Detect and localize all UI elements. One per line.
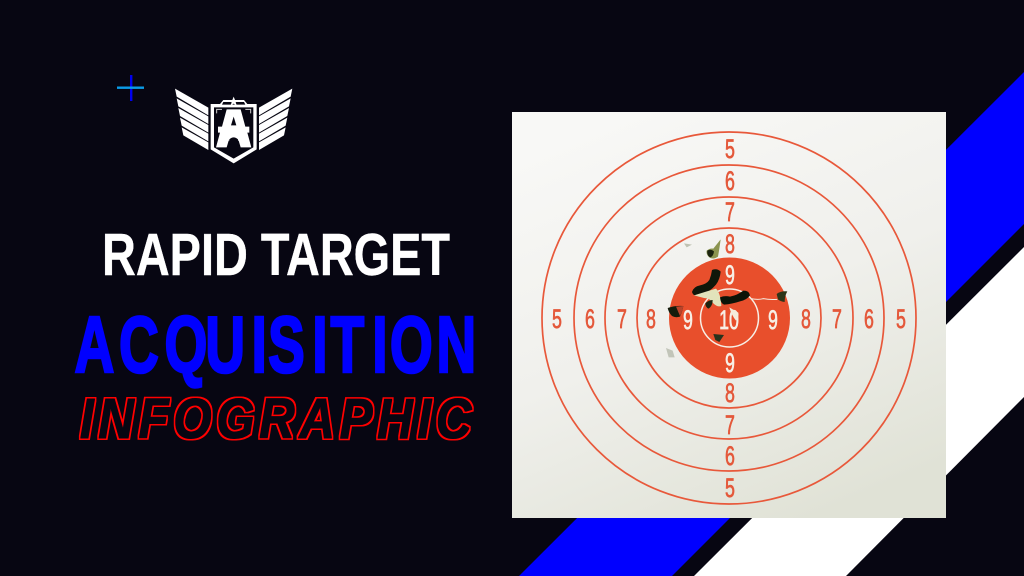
bullet holes	[666, 239, 787, 357]
left wing	[175, 89, 208, 150]
ring numbers: 5	[725, 133, 735, 164]
shield	[211, 100, 257, 163]
ring numbers: 7	[725, 196, 735, 227]
title: ACQUISITION: ACQUISITION	[75, 300, 476, 389]
ring numbers: 5	[725, 472, 735, 503]
bullseye numbers: 9	[725, 259, 735, 290]
bullseye numbers: 9	[725, 347, 735, 378]
ring numbers	[552, 133, 906, 503]
ring numbers: 5	[896, 303, 906, 334]
star	[229, 97, 239, 106]
bullseye numbers: 9	[768, 304, 778, 335]
title: RAPID TARGET: RAPID TARGET	[102, 222, 450, 288]
ring numbers: 7	[832, 303, 842, 334]
bullseye numbers: 9	[683, 304, 693, 335]
ring numbers: 6	[725, 440, 735, 471]
ring numbers: 6	[725, 165, 735, 196]
target rings	[542, 132, 916, 504]
ten ring	[700, 289, 758, 347]
panel: paper target	[512, 112, 946, 518]
icon: blue crosshair	[117, 75, 144, 101]
diagonal white band	[694, 247, 1024, 576]
ring numbers: 6	[585, 303, 595, 334]
ring numbers: 8	[725, 377, 735, 408]
ring numbers: 8	[801, 303, 811, 334]
title: INFOGRAPHIC outlined: INFOGRAPHIC	[80, 388, 472, 451]
ring numbers: 7	[725, 409, 735, 440]
ring numbers: 6	[864, 303, 874, 334]
letter A with pistol	[216, 109, 251, 147]
diagonal blue band	[519, 72, 1024, 576]
ring numbers: 7	[617, 303, 627, 334]
sight corners	[217, 109, 251, 113]
right wing	[259, 89, 292, 150]
ring numbers: 5	[552, 303, 562, 334]
bullseye numbers	[683, 259, 778, 378]
ring numbers: 8	[646, 303, 656, 334]
logo: winged shield badge	[175, 89, 292, 163]
bullseye numbers: 10	[719, 304, 739, 335]
red bullseye disc	[669, 258, 790, 378]
ring numbers: 8	[725, 228, 735, 259]
